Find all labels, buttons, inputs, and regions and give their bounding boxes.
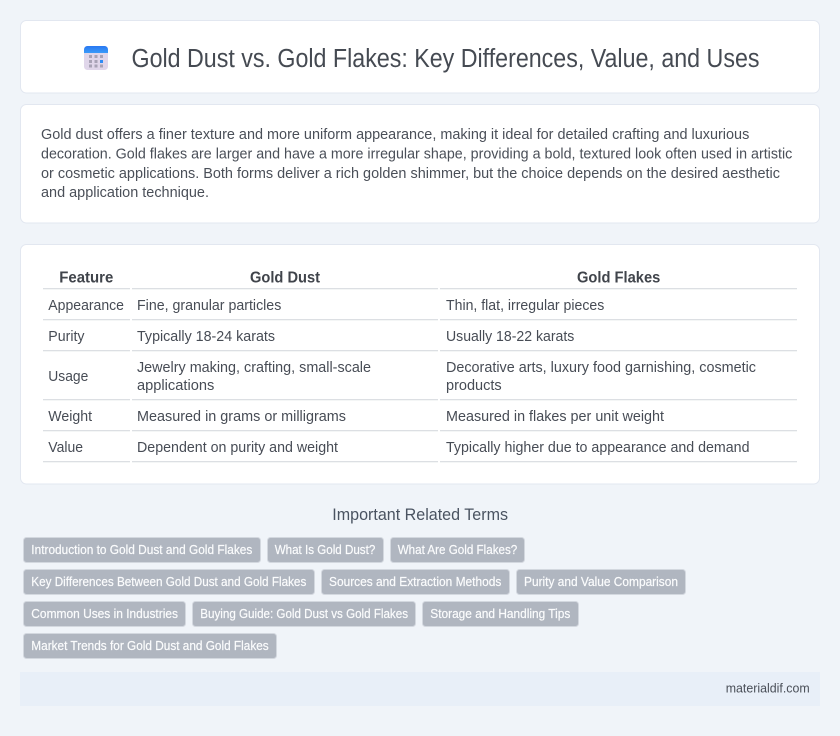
tag: Buying Guide: Gold Dust vs Gold Flakes bbox=[200, 607, 408, 621]
table row: usage: applications bbox=[137, 378, 214, 394]
tag: Common Uses in Industries bbox=[31, 607, 178, 621]
tag: Sources and Extraction Methods bbox=[329, 575, 501, 589]
tag group: related terms bbox=[24, 538, 686, 658]
table row: appearance: Fine, granular particles bbox=[137, 298, 281, 314]
table header: Gold Flakes bbox=[577, 270, 660, 287]
table row: usage: Jewelry making, crafting, small-scale bbox=[137, 360, 371, 376]
tag bbox=[268, 538, 384, 562]
table row: value: Dependent on purity and weight bbox=[137, 440, 338, 456]
table row: value: Typically higher due to appearance and demand bbox=[446, 440, 750, 456]
table row: appearance bbox=[48, 298, 604, 314]
heading: related terms: Important Related Terms bbox=[332, 506, 508, 524]
table row: usage: Usage bbox=[48, 369, 88, 385]
text block: description: Gold dust offers a finer texture and more uniform appearance, making it ideal for detailed crafting and luxurious bbox=[41, 127, 749, 143]
tag bbox=[422, 602, 578, 626]
table row: weight: Measured in flakes per unit weight bbox=[446, 409, 664, 425]
tag: What Are Gold Flakes? bbox=[398, 543, 517, 557]
tag bbox=[516, 570, 686, 594]
table row: weight bbox=[48, 409, 664, 425]
text block: description: decoration. Gold flakes are larger and have a more irregular shape, providing a bold, textured look often used in artistic bbox=[41, 146, 793, 162]
table row: usage bbox=[48, 360, 757, 394]
text block: description: and application technique. bbox=[41, 185, 209, 201]
tag bbox=[24, 538, 260, 562]
table row: value bbox=[48, 440, 750, 456]
panel: header bbox=[20, 20, 820, 93]
table row: purity bbox=[48, 329, 574, 345]
tag bbox=[322, 570, 510, 594]
icon: calendar bbox=[84, 46, 108, 70]
tag: Introduction to Gold Dust and Gold Flakes bbox=[31, 543, 252, 557]
table row: appearance: Appearance bbox=[48, 298, 124, 314]
tag: Market Trends for Gold Dust and Gold Flakes bbox=[31, 639, 269, 653]
tag: Storage and Handling Tips bbox=[430, 607, 570, 621]
table row: weight: Weight bbox=[48, 409, 92, 425]
title: Gold Dust vs. Gold Flakes: Key Differences, Value, and Uses bbox=[132, 45, 760, 73]
table row: weight: Measured in grams or milligrams bbox=[137, 409, 346, 425]
text block: description bbox=[41, 127, 793, 201]
table row: usage: products bbox=[446, 378, 502, 394]
table header: Feature bbox=[59, 270, 113, 287]
tag bbox=[24, 570, 314, 594]
tag: Purity and Value Comparison bbox=[524, 575, 678, 589]
table row: value: Value bbox=[48, 440, 83, 456]
footer bar bbox=[20, 672, 820, 706]
table row: appearance: Thin, flat, irregular pieces bbox=[446, 298, 604, 314]
table row: usage: Decorative arts, luxury food garnishing, cosmetic bbox=[446, 360, 757, 376]
panel: comparison table bbox=[20, 244, 820, 484]
table row: purity: Usually 18-22 karats bbox=[446, 329, 574, 345]
text block: description: or cosmetic applications. Both forms deliver a rich golden shimmer, but the choice depends on the desired aesthetic bbox=[41, 166, 781, 182]
tag: What Is Gold Dust? bbox=[275, 543, 375, 557]
table row: purity: Typically 18-24 karats bbox=[137, 329, 275, 345]
table header: Gold Dust bbox=[250, 270, 321, 287]
footer text: materialdif.com bbox=[726, 682, 810, 696]
tag: Key Differences Between Gold Dust and Gold Flakes bbox=[31, 575, 306, 589]
tag bbox=[24, 634, 276, 658]
tag bbox=[390, 538, 524, 562]
tag bbox=[192, 602, 416, 626]
table row: purity: Purity bbox=[48, 329, 85, 345]
panel: description bbox=[20, 104, 820, 223]
tag bbox=[24, 602, 186, 626]
table header bbox=[59, 270, 660, 287]
